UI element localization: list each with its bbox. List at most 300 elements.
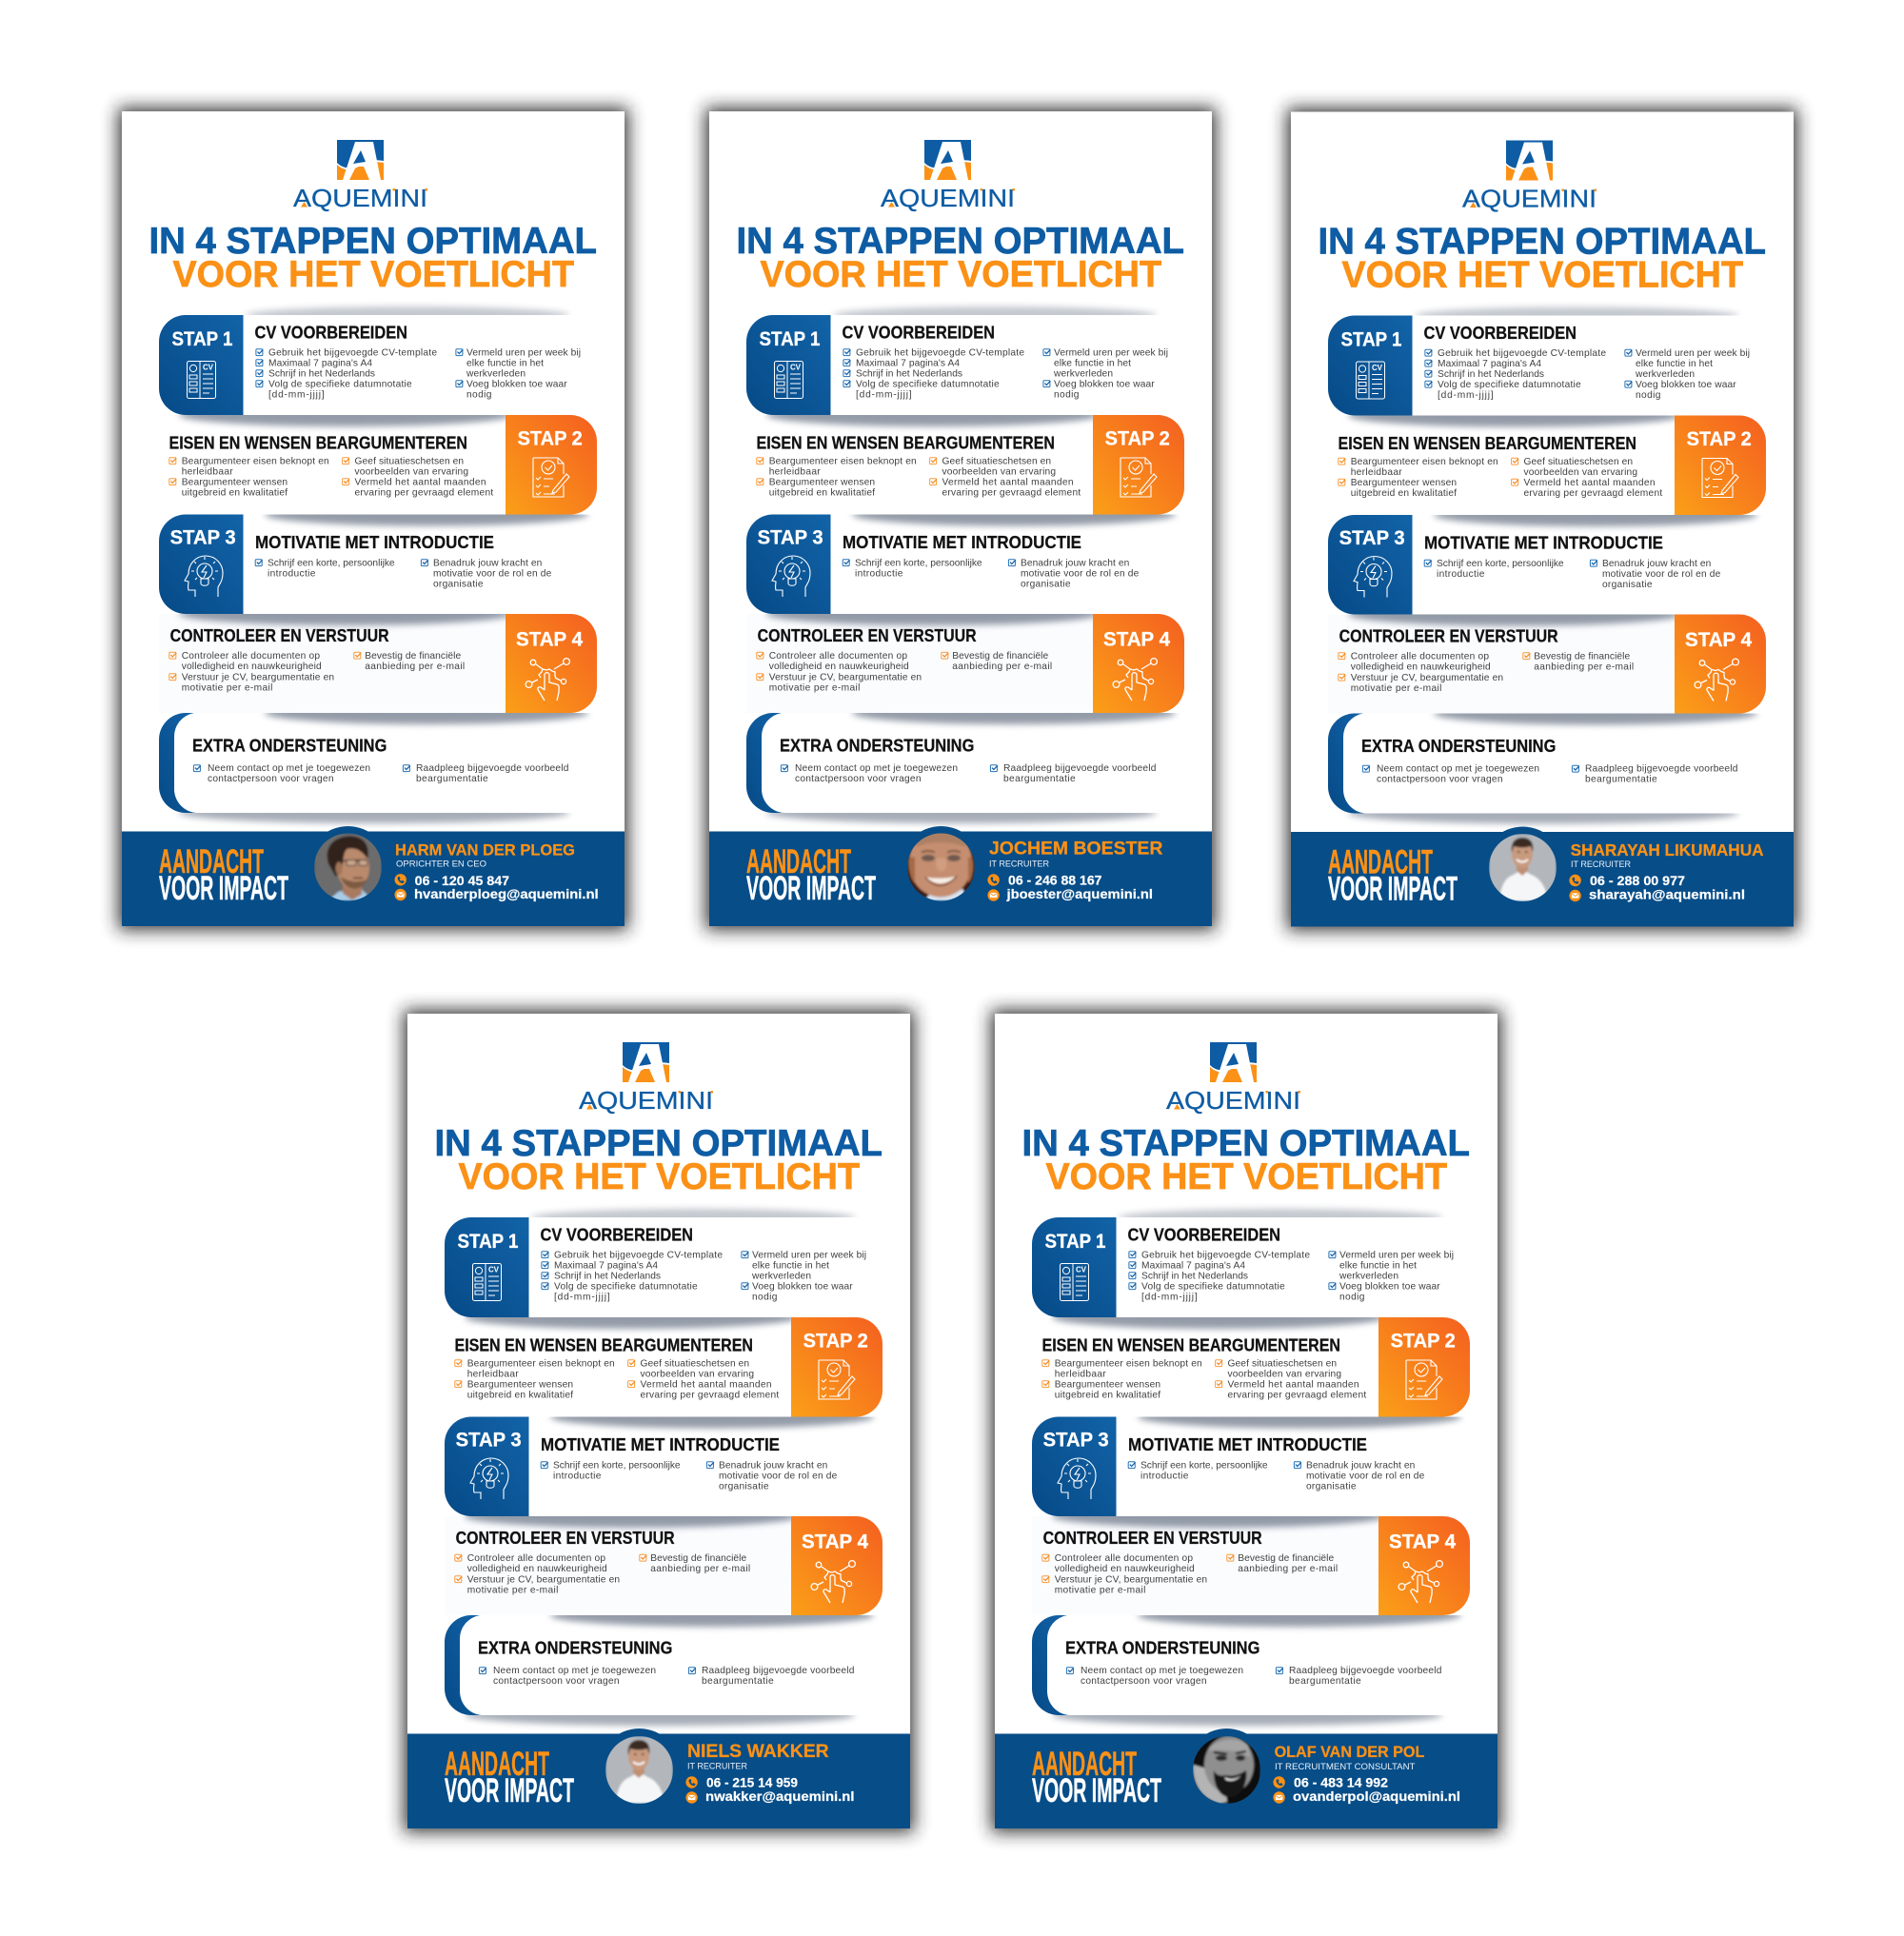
footer: IT RECRUITMENT CONSULTANT — [1275, 1762, 1416, 1772]
footer — [407, 1729, 910, 1828]
title: VOOR HET VOETLICHT — [1045, 1156, 1447, 1197]
footer: VOOR IMPACT — [746, 870, 876, 907]
panel: stap 1: Schrijf in het Nederlands — [1141, 1271, 1248, 1281]
panel: stap 4: STAP 4 — [1103, 628, 1170, 650]
footer: 06 - 120 45 847 — [415, 873, 509, 888]
panel: stap 1: [dd-mm-jjjj] — [268, 389, 325, 400]
footer: HARM VAN DER PLOEG — [395, 840, 575, 859]
panel: stap 1: [dd-mm-jjjj] — [1438, 390, 1494, 401]
panel: stap 2: Beargumenteer eisen beknopt en — [769, 456, 917, 466]
panel: stap 2 — [1339, 415, 1766, 515]
panel: stap 2: STAP 2 — [803, 1331, 868, 1353]
panel: stap 2: EISEN EN WENSEN BEARGUMENTEREN — [1041, 1336, 1340, 1355]
panel: stap 2: Vermeld het aantal maanden — [1523, 478, 1655, 488]
panel: stap 1: werkverleden — [1053, 368, 1113, 379]
panel: stap 2: Beargumenteer wensen — [467, 1379, 573, 1390]
panel: stap 1: werkverleden — [1339, 1271, 1398, 1281]
footer: OPRICHTER EN CEO — [396, 859, 486, 870]
title: IN 4 STAPPEN OPTIMAAL — [434, 1123, 883, 1164]
panel: extra ondersteuning: beargumentatie — [416, 774, 488, 784]
panel: stap 1: Vermeld uren per week bij — [1054, 347, 1168, 358]
title: VOOR HET VOETLICHT — [760, 254, 1161, 295]
panel: stap 4: Controleer alle documenten op — [182, 651, 320, 662]
panel: stap 4: STAP 4 — [1685, 629, 1752, 651]
title: VOOR HET VOETLICHT — [1342, 255, 1743, 295]
panel: stap 4 — [455, 1516, 883, 1615]
panel: stap 2: uitgebreid en kwalitatief — [467, 1390, 573, 1400]
panel: extra ondersteuning: beargumentatie — [1003, 774, 1076, 784]
panel: stap 2: Vermeld het aantal maanden — [354, 477, 486, 487]
panel: stap 3: Benadruk jouw kracht en — [719, 1460, 827, 1471]
panel: stap 3: MOTIVATIE MET INTRODUCTIE — [255, 533, 494, 552]
footer: AANDACHT — [159, 843, 264, 880]
panel: extra ondersteuning — [1328, 714, 1738, 813]
panel: stap 1: Vermeld uren per week bij — [752, 1250, 866, 1260]
panel: stap 2: voorbeelden van ervaring — [354, 466, 468, 477]
panel: stap 1: elke functie in het — [466, 358, 544, 368]
panel: stap 3: motivatie voor de rol en de — [1021, 568, 1140, 579]
panel: stap 4: CONTROLEER EN VERSTUUR — [170, 626, 389, 645]
panel: stap 2 — [169, 415, 597, 514]
panel: stap 2: EISEN EN WENSEN BEARGUMENTEREN — [1339, 434, 1636, 453]
panel: stap 4: Controleer alle documenten op — [467, 1553, 605, 1564]
panel: stap 1: Voeg blokken toe waar — [1636, 380, 1736, 390]
panel: stap 3: Benadruk jouw kracht en — [433, 558, 542, 568]
title — [737, 221, 1184, 295]
panel: stap 3: MOTIVATIE MET INTRODUCTIE — [541, 1435, 780, 1454]
panel: extra ondersteuning: Raadpleeg bijgevoegde voorbeeld — [1585, 763, 1738, 775]
panel: stap 1: Vermeld uren per week bij — [1636, 348, 1750, 359]
panel: extra ondersteuning — [445, 1615, 855, 1715]
footer: AANDACHT — [445, 1746, 549, 1783]
panel: stap 4: Verstuur je CV, beargumentatie en — [467, 1574, 620, 1585]
panel: extra ondersteuning: contactpersoon voor vragen — [1377, 775, 1502, 784]
panel: stap 2: Beargumenteer wensen — [1055, 1379, 1160, 1390]
footer: NIELS WAKKER — [687, 1741, 829, 1762]
panel: stap 4 — [1339, 615, 1766, 714]
panel: stap 4: Verstuur je CV, beargumentatie en — [1055, 1574, 1207, 1585]
footer: 06 - 288 00 977 — [1590, 873, 1685, 888]
panel: stap 4: aanbieding per e-mail — [1238, 1564, 1338, 1574]
logo — [881, 140, 1015, 212]
title: IN 4 STAPPEN OPTIMAAL — [737, 221, 1184, 262]
panel: stap 4 — [169, 614, 597, 713]
footer: AANDACHT — [1032, 1746, 1137, 1783]
panel: stap 1: STAP 1 — [1340, 329, 1402, 350]
panel: stap 3: introductie — [268, 568, 316, 579]
panel: stap 1: [dd-mm-jjjj] — [554, 1292, 610, 1302]
panel: stap 2: Geef situatieschetsen en — [640, 1358, 749, 1369]
panel: stap 4: Controleer alle documenten op — [1055, 1553, 1193, 1564]
panel: extra ondersteuning: contactpersoon voor vragen — [493, 1676, 619, 1687]
panel: stap 3: Benadruk jouw kracht en — [1602, 559, 1711, 569]
footer: SHARAYAH LIKUMAHUA — [1571, 840, 1764, 859]
panel: stap 4: Bevestig de financiële — [952, 651, 1049, 662]
panel: stap 4: STAP 4 — [516, 628, 583, 650]
panel: stap 2: Beargumenteer eisen beknopt en — [182, 456, 329, 466]
panel: stap 2: STAP 2 — [1105, 428, 1170, 450]
logo: AQUEMINI — [293, 184, 427, 212]
panel: stap 2: uitgebreid en kwalitatief — [1351, 488, 1457, 499]
panel: stap 3: motivatie voor de rol en de — [1602, 569, 1721, 580]
panel: stap 3: Schrijf een korte, persoonlijke — [1140, 1460, 1268, 1471]
footer — [709, 826, 1212, 926]
panel: stap 3: introductie — [855, 568, 903, 579]
poster 3: Sharayah Likumahua — [1287, 109, 1797, 931]
panel: stap 1: CV VOORBEREIDEN — [842, 324, 995, 343]
panel: stap 1: Voeg blokken toe waar — [1054, 379, 1155, 389]
panel: stap 1: Maximaal 7 pagina's A4 — [1438, 359, 1541, 369]
panel: stap 4: motivatie per e-mail — [1055, 1585, 1145, 1595]
panel: stap 4: Bevestig de financiële — [650, 1553, 747, 1564]
panel: stap 1: elke functie in het — [1636, 359, 1713, 369]
panel: stap 1 — [746, 315, 1168, 415]
footer: VOOR IMPACT — [1328, 870, 1458, 908]
panel: stap 3: STAP 3 — [1339, 527, 1405, 549]
panel: stap 3: Benadruk jouw kracht en — [1021, 558, 1129, 568]
panel: stap 1 — [445, 1217, 866, 1317]
logo: AQUEMINI — [881, 184, 1015, 212]
panel: stap 3: Schrijf een korte, persoonlijke — [268, 558, 395, 568]
panel: stap 3: MOTIVATIE MET INTRODUCTIE — [843, 533, 1081, 552]
panel: stap 4: volledigheid en nauwkeurigheid — [1351, 662, 1491, 672]
title: VOOR HET VOETLICHT — [173, 254, 574, 295]
panel: stap 1: STAP 1 — [171, 328, 233, 350]
panel: stap 3: MOTIVATIE MET INTRODUCTIE — [1424, 533, 1663, 552]
panel: stap 3: motivatie voor de rol en de — [1306, 1471, 1425, 1481]
panel: stap 2: voorbeelden van ervaring — [1523, 467, 1637, 478]
panel: stap 1: Maximaal 7 pagina's A4 — [554, 1260, 658, 1271]
panel: extra ondersteuning: beargumentatie — [1585, 775, 1657, 784]
panel: stap 3: Benadruk jouw kracht en — [1306, 1460, 1415, 1471]
panel: stap 4: CONTROLEER EN VERSTUUR — [758, 626, 977, 645]
panel: extra ondersteuning: beargumentatie — [702, 1676, 774, 1687]
footer: IT RECRUITER — [989, 859, 1049, 870]
panel: stap 2: herleidbaar — [182, 466, 233, 477]
panel: stap 4: volledigheid en nauwkeurigheid — [1055, 1564, 1195, 1574]
panel: stap 1: STAP 1 — [760, 328, 821, 350]
panel: stap 1: STAP 1 — [1045, 1231, 1106, 1253]
panel: stap 2: voorbeelden van ervaring — [942, 466, 1056, 477]
panel: stap 4: STAP 4 — [1389, 1531, 1456, 1552]
panel: stap 3: introductie — [1437, 569, 1485, 580]
panel: stap 3: Schrijf een korte, persoonlijke — [1437, 559, 1564, 569]
panel: extra ondersteuning: Neem contact op met je toegewezen — [1377, 763, 1539, 775]
panel: stap 1: Gebruik het bijgevoegde CV-template — [268, 347, 437, 358]
panel: stap 4: motivatie per e-mail — [1351, 683, 1441, 694]
panel: stap 4: motivatie per e-mail — [182, 682, 272, 693]
panel: stap 1: Voeg blokken toe waar — [1339, 1281, 1440, 1292]
panel: stap 1: STAP 1 — [457, 1231, 519, 1253]
panel: stap 1: elke functie in het — [1054, 358, 1131, 368]
panel: stap 4: Controleer alle documenten op — [769, 651, 907, 662]
panel: stap 4 — [757, 614, 1184, 713]
panel: extra ondersteuning: Neem contact op met je toegewezen — [208, 763, 370, 774]
footer: AANDACHT — [1328, 843, 1433, 881]
panel: stap 2: ervaring per gevraagd element — [1228, 1390, 1366, 1400]
panel: stap 1: Gebruik het bijgevoegde CV-template — [856, 347, 1024, 358]
title: IN 4 STAPPEN OPTIMAAL — [1022, 1123, 1470, 1164]
panel: stap 1: nodig — [1339, 1292, 1365, 1302]
panel: stap 1 — [159, 315, 581, 415]
panel: extra ondersteuning: EXTRA ONDERSTEUNING — [780, 736, 974, 755]
panel: stap 1: Schrijf in het Nederlands — [856, 368, 962, 379]
panel: stap 4: Verstuur je CV, beargumentatie en — [182, 672, 334, 682]
panel: stap 3 — [159, 514, 552, 614]
panel: stap 4: aanbieding per e-mail — [650, 1564, 750, 1574]
panel: extra ondersteuning: Neem contact op met je toegewezen — [795, 763, 958, 774]
panel: extra ondersteuning: Raadpleeg bijgevoegde voorbeeld — [1289, 1666, 1442, 1676]
footer: IT RECRUITER — [687, 1762, 747, 1772]
panel: stap 2: Geef situatieschetsen en — [354, 456, 464, 466]
title — [149, 221, 597, 295]
panel: stap 4: Verstuur je CV, beargumentatie en — [769, 672, 922, 682]
panel: stap 4: volledigheid en nauwkeurigheid — [769, 662, 909, 672]
panel: stap 2 — [455, 1317, 883, 1416]
panel: stap 3: motivatie voor de rol en de — [719, 1471, 838, 1481]
panel: stap 1: Maximaal 7 pagina's A4 — [268, 358, 372, 368]
panel: stap 3 — [445, 1416, 838, 1516]
panel: stap 1: Volg de specifieke datumnotatie — [1141, 1281, 1285, 1292]
panel: stap 1: [dd-mm-jjjj] — [856, 389, 912, 400]
logo: AQUEMINI — [579, 1086, 713, 1115]
panel: stap 2: Beargumenteer eisen beknopt en — [1351, 457, 1498, 467]
logo: AQUEMINI — [1462, 185, 1597, 213]
poster 4: Niels Wakker — [404, 1010, 914, 1832]
panel: stap 1: Volg de specifieke datumnotatie — [1438, 380, 1581, 390]
panel: stap 3 — [1328, 515, 1721, 615]
footer: ovanderpol@aquemini.nl — [1293, 1788, 1460, 1804]
panel: stap 2: ervaring per gevraagd element — [1523, 488, 1662, 499]
panel: stap 2: herleidbaar — [769, 466, 821, 477]
panel: stap 4: aanbieding per e-mail — [952, 662, 1052, 672]
panel: stap 2: Geef situatieschetsen en — [942, 456, 1051, 466]
panel: stap 4 — [1042, 1516, 1470, 1615]
panel: stap 2: ervaring per gevraagd element — [640, 1390, 779, 1400]
panel: stap 4: Verstuur je CV, beargumentatie en — [1351, 673, 1503, 683]
footer: VOOR IMPACT — [1032, 1772, 1161, 1809]
panel: extra ondersteuning: contactpersoon voor vragen — [1081, 1676, 1207, 1687]
panel: stap 1: Schrijf in het Nederlands — [1438, 369, 1544, 380]
panel: stap 3: organisatie — [1602, 580, 1653, 590]
panel: stap 1: CV VOORBEREIDEN — [541, 1226, 693, 1245]
footer: VOOR IMPACT — [159, 870, 288, 907]
panel: stap 1 — [1032, 1217, 1454, 1317]
footer: nwakker@aquemini.nl — [705, 1788, 855, 1804]
panel: stap 2: Vermeld het aantal maanden — [1228, 1379, 1359, 1390]
footer: JOCHEM BOESTER — [989, 840, 1163, 859]
poster 5: Olaf van der Pol — [991, 1010, 1501, 1832]
panel: stap 1: elke functie in het — [752, 1260, 829, 1271]
poster 2: Jochem Boester — [705, 108, 1216, 930]
logo — [579, 1042, 713, 1115]
panel: stap 2: EISEN EN WENSEN BEARGUMENTEREN — [169, 434, 467, 453]
panel: stap 3: organisatie — [433, 579, 484, 589]
panel: stap 2: Beargumenteer wensen — [182, 477, 288, 487]
logo — [1166, 1042, 1300, 1115]
logo: AQUEMINI — [1166, 1086, 1300, 1115]
panel: stap 1: Voeg blokken toe waar — [466, 379, 567, 389]
panel: stap 1: nodig — [752, 1292, 778, 1302]
panel: stap 2: herleidbaar — [467, 1369, 519, 1379]
panel: stap 2: EISEN EN WENSEN BEARGUMENTEREN — [756, 434, 1055, 453]
panel: extra ondersteuning: EXTRA ONDERSTEUNING — [1361, 737, 1556, 756]
logo — [1462, 141, 1597, 213]
panel: stap 3: organisatie — [1306, 1481, 1357, 1492]
panel: stap 1: Gebruik het bijgevoegde CV-template — [1438, 348, 1606, 359]
footer: jboester@aquemini.nl — [1005, 886, 1153, 901]
panel: stap 1: Gebruik het bijgevoegde CV-template — [554, 1250, 723, 1260]
panel: stap 3: organisatie — [1021, 579, 1071, 589]
panel: extra ondersteuning: EXTRA ONDERSTEUNING — [478, 1638, 672, 1657]
panel: extra ondersteuning: Raadpleeg bijgevoegde voorbeeld — [416, 763, 569, 774]
panel: extra ondersteuning: Raadpleeg bijgevoegde voorbeeld — [702, 1666, 855, 1676]
panel: stap 3: Schrijf een korte, persoonlijke — [855, 558, 982, 568]
footer — [995, 1729, 1497, 1828]
panel: stap 1: Maximaal 7 pagina's A4 — [856, 358, 960, 368]
panel: stap 2: voorbeelden van ervaring — [1228, 1369, 1341, 1379]
panel: extra ondersteuning: Raadpleeg bijgevoegde voorbeeld — [1003, 763, 1157, 774]
panel: extra ondersteuning — [159, 713, 569, 813]
panel: extra ondersteuning: EXTRA ONDERSTEUNING — [1065, 1638, 1259, 1657]
panel: stap 4: CONTROLEER EN VERSTUUR — [1339, 626, 1558, 645]
panel: stap 4: volledigheid en nauwkeurigheid — [467, 1564, 607, 1574]
panel: stap 1: nodig — [1054, 389, 1080, 400]
panel: stap 2: Beargumenteer eisen beknopt en — [1055, 1358, 1202, 1369]
panel: stap 4: CONTROLEER EN VERSTUUR — [456, 1529, 675, 1548]
panel: stap 1: Volg de specifieke datumnotatie — [856, 379, 1000, 389]
panel: stap 3: organisatie — [719, 1481, 769, 1492]
panel: stap 1: CV VOORBEREIDEN — [1424, 324, 1577, 343]
panel: extra ondersteuning: beargumentatie — [1289, 1676, 1361, 1687]
panel: stap 2: Vermeld het aantal maanden — [942, 477, 1074, 487]
panel: stap 4: aanbieding per e-mail — [1534, 662, 1634, 672]
panel: stap 2: STAP 2 — [518, 428, 583, 450]
panel: stap 2 — [1041, 1317, 1470, 1416]
footer: VOOR IMPACT — [445, 1772, 574, 1809]
title: IN 4 STAPPEN OPTIMAAL — [149, 221, 597, 262]
panel: stap 2: STAP 2 — [1391, 1331, 1456, 1353]
panel: stap 3: Schrijf een korte, persoonlijke — [553, 1460, 681, 1471]
panel: stap 4: Bevestig de financiële — [1534, 651, 1631, 662]
panel: stap 1: nodig — [466, 389, 492, 400]
panel: stap 3: STAP 3 — [170, 527, 236, 549]
panel: stap 1: werkverleden — [466, 368, 526, 379]
panel: stap 2: herleidbaar — [1055, 1369, 1106, 1379]
panel: stap 2: ervaring per gevraagd element — [942, 487, 1081, 498]
panel: stap 2: Vermeld het aantal maanden — [640, 1379, 771, 1390]
title: IN 4 STAPPEN OPTIMAAL — [1318, 221, 1766, 263]
panel: stap 4: aanbieding per e-mail — [365, 662, 465, 672]
poster 1: Harm van der Ploeg — [118, 108, 628, 930]
footer: hvanderploeg@aquemini.nl — [414, 886, 599, 901]
panel: stap 3: STAP 3 — [758, 527, 823, 549]
panel: stap 3: STAP 3 — [456, 1430, 522, 1452]
panel: stap 3: introductie — [553, 1471, 602, 1481]
panel: extra ondersteuning — [746, 713, 1157, 813]
title — [1318, 221, 1766, 295]
panel: stap 4: motivatie per e-mail — [467, 1585, 558, 1595]
panel: extra ondersteuning: contactpersoon voor vragen — [795, 774, 922, 784]
panel: stap 4: motivatie per e-mail — [769, 682, 860, 693]
panel: stap 3: STAP 3 — [1043, 1430, 1109, 1452]
panel: extra ondersteuning — [1032, 1615, 1442, 1715]
title — [1022, 1123, 1470, 1197]
footer: sharayah@aquemini.nl — [1589, 887, 1745, 902]
panel: stap 3: motivatie voor de rol en de — [433, 568, 552, 579]
panel: stap 2 — [756, 415, 1184, 514]
panel: stap 1: Maximaal 7 pagina's A4 — [1141, 1260, 1245, 1271]
panel: stap 2: EISEN EN WENSEN BEARGUMENTEREN — [455, 1336, 753, 1355]
panel: extra ondersteuning: Neem contact op met je toegewezen — [1081, 1666, 1243, 1676]
title — [434, 1123, 883, 1197]
footer: 06 - 215 14 959 — [706, 1775, 798, 1790]
panel: stap 1: werkverleden — [1635, 369, 1695, 380]
panel: extra ondersteuning: Neem contact op met je toegewezen — [493, 1666, 656, 1676]
panel: stap 2: uitgebreid en kwalitatief — [182, 487, 288, 498]
panel: stap 4: Bevestig de financiële — [365, 651, 462, 662]
panel: stap 4: Controleer alle documenten op — [1351, 651, 1489, 662]
panel: stap 1: Vermeld uren per week bij — [466, 347, 581, 358]
panel: stap 4: CONTROLEER EN VERSTUUR — [1043, 1529, 1262, 1548]
panel: extra ondersteuning: EXTRA ONDERSTEUNING — [192, 736, 387, 755]
panel: stap 1: Schrijf in het Nederlands — [268, 368, 375, 379]
footer: 06 - 483 14 992 — [1294, 1775, 1388, 1790]
footer: AANDACHT — [746, 843, 851, 880]
panel: stap 3: introductie — [1140, 1471, 1189, 1481]
footer: OLAF VAN DER POL — [1275, 1744, 1424, 1761]
footer: IT RECRUITER — [1571, 859, 1631, 870]
panel: stap 2: ervaring per gevraagd element — [354, 487, 493, 498]
panel: stap 4: volledigheid en nauwkeurigheid — [182, 662, 322, 672]
footer: 06 - 246 88 167 — [1008, 873, 1102, 888]
panel: stap 1: nodig — [1636, 390, 1661, 401]
panel: stap 1: Voeg blokken toe waar — [752, 1281, 853, 1292]
panel: stap 3 — [746, 514, 1140, 614]
title: VOOR HET VOETLICHT — [459, 1156, 860, 1197]
panel: stap 2: STAP 2 — [1687, 428, 1752, 450]
panel: stap 1: Volg de specifieke datumnotatie — [268, 379, 412, 389]
panel: stap 2: voorbeelden van ervaring — [640, 1369, 754, 1379]
panel: stap 1: [dd-mm-jjjj] — [1141, 1292, 1198, 1302]
panel: stap 2: herleidbaar — [1351, 467, 1402, 478]
panel: stap 4: Bevestig de financiële — [1238, 1553, 1335, 1564]
panel: stap 1: werkverleden — [751, 1271, 811, 1281]
panel: stap 2: Geef situatieschetsen en — [1228, 1358, 1337, 1369]
footer — [1291, 826, 1794, 927]
footer — [122, 826, 625, 926]
panel: stap 3: MOTIVATIE MET INTRODUCTIE — [1128, 1435, 1367, 1454]
panel: stap 2: Geef situatieschetsen en — [1523, 457, 1633, 467]
panel: stap 1 — [1328, 316, 1750, 415]
panel: stap 1: elke functie in het — [1339, 1260, 1417, 1271]
panel: stap 1: Gebruik het bijgevoegde CV-template — [1141, 1250, 1310, 1260]
panel: stap 1: Schrijf in het Nederlands — [554, 1271, 661, 1281]
panel: stap 4: STAP 4 — [802, 1531, 868, 1552]
panel: stap 1: CV VOORBEREIDEN — [1127, 1226, 1280, 1245]
panel: stap 1: CV VOORBEREIDEN — [255, 324, 407, 343]
panel: stap 2: uitgebreid en kwalitatief — [769, 487, 875, 498]
panel: stap 3 — [1032, 1416, 1425, 1516]
panel: stap 2: Beargumenteer wensen — [769, 477, 875, 487]
panel: stap 1: Volg de specifieke datumnotatie — [554, 1281, 698, 1292]
panel: extra ondersteuning: contactpersoon voor vragen — [208, 774, 333, 784]
panel: stap 2: Beargumenteer eisen beknopt en — [467, 1358, 615, 1369]
panel: stap 2: uitgebreid en kwalitatief — [1055, 1390, 1160, 1400]
panel: stap 2: Beargumenteer wensen — [1351, 478, 1457, 488]
panel: stap 1: Vermeld uren per week bij — [1339, 1250, 1454, 1260]
logo — [293, 140, 427, 212]
